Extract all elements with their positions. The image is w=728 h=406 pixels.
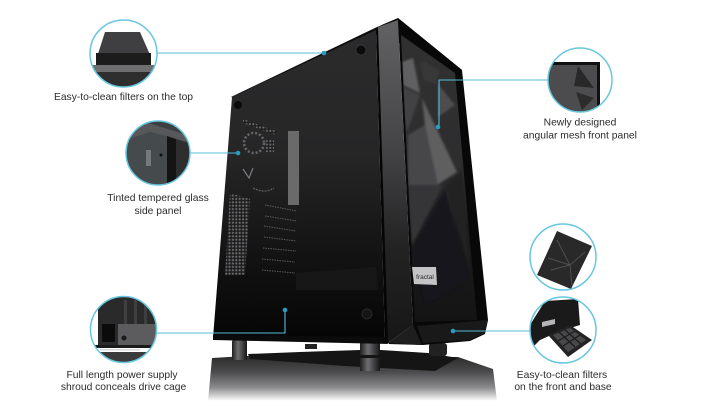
callout circle: PSU shroud — [90, 296, 158, 365]
thumb screws — [356, 45, 366, 55]
label: mesh front: angular mesh front panel — [523, 130, 637, 142]
front mesh panel — [401, 35, 477, 322]
callout circle: front filter — [530, 224, 596, 290]
label: front and base filters: on the front and base — [514, 382, 612, 393]
front outer frame — [388, 18, 488, 345]
label: mesh front — [523, 118, 637, 142]
top edge — [231, 18, 462, 100]
PC case — [213, 18, 488, 345]
callout circle: mesh front — [548, 48, 612, 112]
shroud reflection band — [296, 267, 378, 290]
case feet — [232, 340, 447, 371]
label: front and base filters: Easy-to-clean filters — [517, 370, 607, 381]
label: tinted glass — [107, 193, 209, 217]
label: tinted glass: Tinted tempered glass — [107, 193, 209, 204]
label: front and base filters — [514, 370, 612, 393]
callout dots — [236, 51, 455, 333]
callout circle: top filters — [88, 20, 160, 90]
bottom frame — [213, 335, 388, 344]
label: tinted glass: side panel — [135, 206, 181, 217]
callout lines — [156, 53, 548, 333]
callout circle: base filter — [530, 297, 596, 363]
label: PSU shroud: shroud conceals drive cage — [61, 382, 186, 393]
pedestal below case — [208, 350, 497, 401]
label: PSU shroud: Full length power supply — [66, 370, 178, 381]
label: PSU shroud — [61, 370, 186, 393]
label: top filters: Easy-to-clean filters on the top — [54, 92, 193, 103]
logo badge: fractal — [416, 274, 434, 281]
label: mesh front: Newly designed — [544, 118, 617, 128]
angular mesh facets — [402, 58, 467, 253]
motherboard tray details — [225, 119, 299, 275]
front frame pillar — [378, 20, 413, 343]
logo badge — [412, 267, 437, 285]
pillar lower bevel — [388, 325, 422, 345]
side glass panel — [213, 30, 385, 342]
callout circle: tinted glass — [126, 121, 192, 190]
front base strip — [417, 320, 488, 343]
black seam beside pillar — [376, 27, 389, 343]
